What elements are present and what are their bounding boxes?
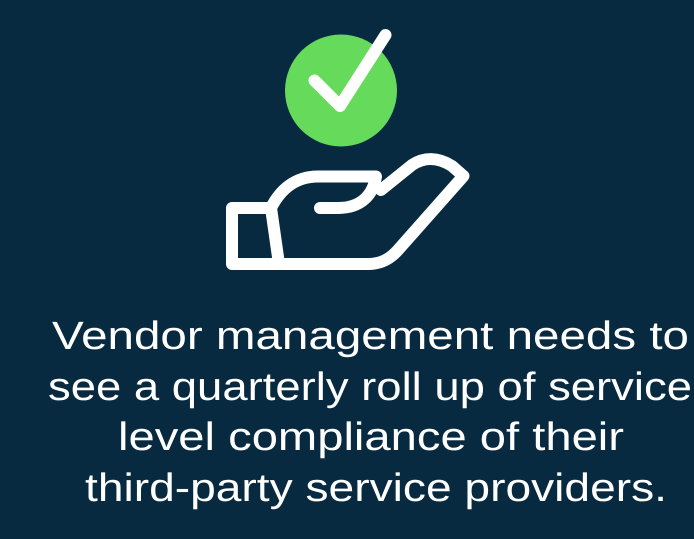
text block: vendor management statement <box>48 314 692 510</box>
text block: vendor management statement: Vendor management needs to <box>52 314 689 358</box>
text block: vendor management statement: third-party service providers. <box>85 466 667 510</box>
text block: vendor management statement: see a quarterly roll up of service <box>48 365 692 409</box>
icon: green circle with check mark <box>285 34 397 146</box>
icon: open hand <box>232 159 464 264</box>
text block: vendor management statement: level compliance of their <box>118 415 624 459</box>
